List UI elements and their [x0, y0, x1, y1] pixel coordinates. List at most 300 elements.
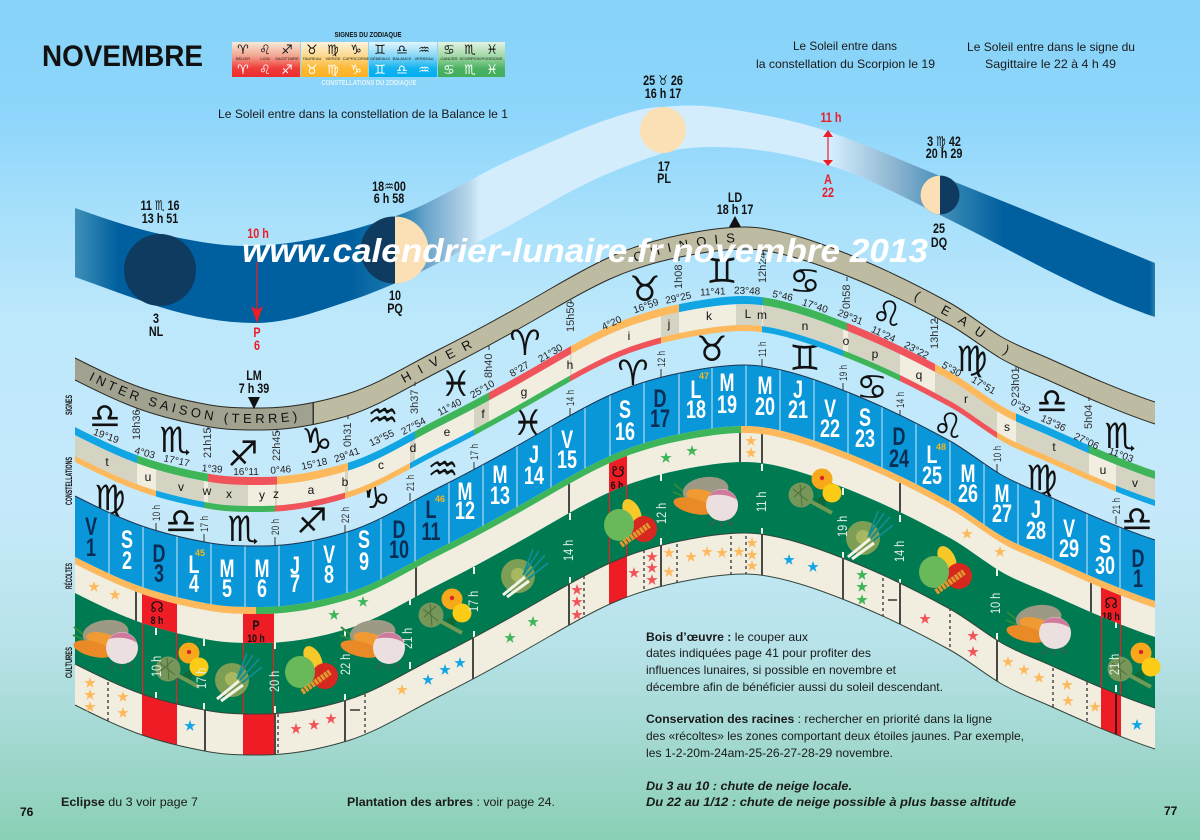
constellation symbols: ♋	[856, 368, 888, 408]
day labels: 11	[421, 517, 441, 546]
zodiac legend: ♍	[327, 63, 339, 78]
sign symbols: ♋	[789, 262, 821, 302]
constellation band fill	[75, 304, 1155, 506]
sign symbols: ♒	[367, 397, 399, 437]
day labels: 17	[650, 404, 670, 433]
full moon: 16 h 17	[645, 86, 682, 101]
full moon: 25 ♉ 26	[643, 73, 683, 88]
constellation colour stripe	[75, 325, 1155, 512]
sign time labels: 0h58	[841, 285, 853, 309]
footer notes: Plantation des arbres : voir page 24.	[347, 795, 555, 809]
constellation symbols: ♒	[427, 450, 459, 490]
sign time labels: 15h50	[565, 301, 577, 332]
constellation letters: o	[843, 334, 850, 348]
harvest band: ☊	[150, 598, 164, 616]
constellation time labels: 17 h	[469, 444, 481, 460]
text block: bois d'oeuvre: influences lunaires, si possible en novembre et	[646, 663, 897, 677]
degree labels: 27°06	[1072, 431, 1101, 452]
day labels: L	[691, 375, 701, 404]
sign time labels: 22h45	[271, 430, 283, 461]
day labels: M	[458, 477, 472, 506]
icons: lettuce and leek	[215, 511, 893, 701]
zodiac legend: ♐	[281, 63, 293, 78]
zodiac legend: ♓	[486, 43, 498, 58]
zodiac legend: ♉	[306, 63, 318, 78]
zodiac legend: BALANCE	[393, 56, 412, 61]
harvest band: 10 h	[247, 633, 265, 645]
day labels: D	[153, 539, 165, 568]
crops time labels: 14 h	[892, 541, 907, 562]
side labels	[64, 395, 75, 678]
harvest band: P	[252, 618, 260, 633]
degree labels: 13°36	[1039, 413, 1068, 434]
degree labels: 4°20	[600, 314, 624, 333]
sign symbols	[89, 252, 1136, 475]
crops time labels: 14 h	[561, 540, 576, 561]
zodiac legend: SAGITTAIRE	[275, 56, 299, 61]
day labels: 16	[615, 417, 635, 446]
sign symbols: ♐	[227, 435, 259, 475]
constellation letters: r	[964, 392, 968, 406]
title: NOVEMBRE	[42, 40, 203, 73]
lunar standstill markers: LD	[728, 190, 742, 205]
text block: snow notes	[646, 779, 1016, 809]
day labels: 18	[686, 395, 706, 424]
constellation time labels: 17 h	[199, 516, 211, 532]
day labels: L	[927, 440, 937, 469]
zodiac legend: ♒	[418, 63, 430, 78]
day labels: 1	[1133, 564, 1143, 593]
constellation time labels: 19 h	[838, 365, 850, 381]
zodiac legend: SCORPION	[459, 56, 481, 61]
day labels: D	[1132, 544, 1144, 573]
icons: fruit and wheat	[285, 496, 972, 692]
zodiac legend	[232, 30, 505, 87]
day labels: M	[255, 554, 269, 583]
day labels: 29	[1059, 534, 1079, 563]
day labels: M	[493, 460, 507, 489]
crops time labels: 21 h	[400, 628, 415, 649]
sign symbols: ♑	[301, 422, 333, 462]
new moon: 13 h 51	[142, 211, 179, 226]
zodiac legend: SIGNES DU ZODIAQUE	[334, 30, 402, 39]
apogee arrow: 22	[822, 185, 834, 200]
constellation letters: a	[308, 483, 315, 497]
degree labels: 16°59	[632, 297, 661, 316]
season band: ( EAU )	[914, 292, 1008, 356]
sign time labels: 18h36	[131, 409, 143, 440]
text block: snow notes: Du 22 au 1/12 : chute de neige possible à plus basse altitude	[646, 795, 1016, 809]
constellation letters: m	[757, 308, 767, 322]
zodiac legend: ♓	[486, 63, 498, 78]
constellation letters: n	[802, 319, 808, 333]
constellation symbols: ♑	[359, 477, 391, 517]
day labels: J	[290, 551, 300, 580]
crops time labels: 11 h	[754, 492, 769, 512]
day band	[75, 360, 1155, 610]
constellation letters: v	[178, 480, 184, 494]
last quarter moon: 20 h 29	[926, 146, 963, 161]
zodiac legend: ♊	[374, 43, 386, 58]
day labels: V	[85, 512, 97, 541]
sign time labels: 1h08	[673, 265, 685, 289]
constellation letters: i	[628, 329, 630, 343]
first quarter moon: 6 h 58	[374, 191, 405, 206]
zodiac legend: ♊	[374, 63, 386, 78]
constellation time labels: 10 h	[151, 505, 163, 521]
day labels: 7	[290, 569, 300, 598]
day labels: 21	[788, 395, 808, 424]
apogee arrow: A	[824, 172, 832, 187]
degree labels: 25°10	[469, 378, 497, 401]
header notes: Le Soleil entre dans la constellation de la Balance le 1	[218, 107, 508, 121]
harvest band: 6 h	[611, 480, 623, 492]
day labels: 24	[889, 444, 909, 473]
constellation letters: t	[1052, 440, 1056, 454]
constellation letters: k	[706, 309, 713, 323]
day labels: M	[758, 371, 772, 400]
sign time labels: 23h01	[1010, 367, 1022, 398]
day labels: M	[961, 459, 975, 488]
day labels: J	[1031, 495, 1041, 524]
header notes: Sagittaire le 22 à 4 h 49	[985, 57, 1116, 71]
sign time labels: 21h15	[202, 427, 214, 458]
constellation letters: w	[202, 484, 212, 498]
degree labels: 15°18	[300, 456, 329, 473]
first quarter moon	[360, 179, 428, 316]
constellation time labels: 21 h	[405, 475, 417, 491]
constellation letters: j	[667, 317, 670, 331]
footer notes	[61, 795, 555, 809]
season band: HIVER	[400, 340, 472, 383]
day labels: 6	[257, 574, 267, 603]
degree labels: 21°30	[537, 342, 565, 365]
zodiac legend: TAUREAU	[303, 56, 322, 61]
watermark: www.calendrier-lunaire.fr novembre 2013	[242, 232, 928, 269]
last quarter moon	[920, 134, 963, 250]
day labels: J	[529, 440, 539, 469]
crops time labels: 12 h	[654, 503, 669, 524]
day labels: 13	[490, 481, 510, 510]
last quarter moon: 3 ♍ 42	[927, 134, 961, 149]
day labels: 8	[324, 560, 334, 589]
degree labels: 0°32	[1009, 397, 1032, 417]
text block: snow notes: Du 3 au 10 : chute de neige locale.	[646, 779, 852, 793]
text block: conservation: des «récoltes» les zones comportant deux étoiles jaunes. Par exemple,	[646, 729, 1024, 743]
day labels: M	[995, 479, 1009, 508]
degree labels: 1°39	[201, 463, 223, 476]
constellation symbols: ♌	[932, 407, 964, 447]
zodiac legend: POISSONS	[482, 56, 503, 61]
page numbers	[20, 804, 1178, 819]
side labels: RÉCOLTES	[64, 563, 75, 589]
sign symbols: ♌	[871, 295, 903, 335]
sign symbols: ♎	[89, 397, 121, 437]
constellation time labels: 12 h	[656, 351, 668, 367]
sign symbols: ♍	[956, 340, 988, 380]
day labels: 27	[992, 499, 1012, 528]
harvest band: 18 h	[1102, 611, 1120, 623]
degree labels: 17°51	[969, 375, 998, 397]
crops time labels: 22 h	[338, 654, 353, 675]
constellation letters: e	[444, 425, 451, 439]
degree labels: 23°48	[734, 286, 761, 297]
day labels: V	[561, 425, 573, 454]
day labels: S	[1099, 530, 1111, 559]
day labels: 15	[557, 445, 577, 474]
new moon: 3	[153, 311, 159, 326]
degree labels: 11°24	[869, 324, 897, 345]
header notes	[218, 39, 1135, 121]
sign time labels: 13h12	[929, 318, 941, 349]
day labels: 20	[755, 392, 775, 421]
lunar standstill markers: 18 h 17	[717, 202, 754, 217]
crops band	[75, 462, 1155, 714]
zodiac legend: ♐	[281, 43, 293, 58]
zodiac legend: ♎	[396, 63, 408, 78]
season band	[74, 226, 1156, 430]
day labels: 45	[195, 548, 205, 558]
day labels: D	[654, 384, 666, 413]
day labels: L	[426, 495, 436, 524]
zodiac legend: ♏	[464, 43, 476, 58]
day labels: 1	[86, 533, 96, 562]
day labels: D	[393, 515, 405, 544]
constellation letters: u	[145, 470, 151, 484]
constellation time labels: 21 h	[1111, 498, 1123, 514]
first quarter moon: 10	[389, 288, 401, 303]
degree labels: 4°03	[133, 446, 156, 462]
day labels: 23	[855, 424, 875, 453]
day labels: M	[720, 368, 734, 397]
sign symbols: ♓	[440, 365, 472, 405]
constellation symbols: ♓	[512, 404, 544, 444]
constellation symbols: ♍	[94, 479, 126, 519]
constellation letters: s	[1004, 420, 1010, 434]
day labels: 28	[1026, 516, 1046, 545]
day labels: 14	[524, 461, 544, 490]
crops time labels: 20 h	[267, 671, 282, 692]
zodiac legend: ♈	[237, 63, 249, 78]
sign time labels: 0h31	[342, 423, 354, 447]
day labels: S	[859, 403, 871, 432]
zodiac legend: ♈	[237, 43, 249, 58]
sign symbols: ♈	[509, 324, 541, 364]
icons: artichoke and flowers	[156, 468, 1160, 687]
season band: CHINOIS	[634, 233, 734, 261]
sign symbols: ♏	[1104, 417, 1136, 457]
degree labels: 5°46	[771, 289, 794, 304]
constellation letters: b	[342, 475, 349, 489]
zodiac legend: ♉	[306, 43, 318, 58]
sign time labels: 12h24	[757, 252, 769, 283]
constellation letters: c	[378, 458, 384, 472]
apogee arrow: 11 h	[820, 110, 842, 125]
constellation letters: p	[872, 347, 879, 361]
day labels: V	[1063, 514, 1075, 543]
constellation letters: v	[1132, 476, 1138, 490]
constellation symbols: ♈	[617, 354, 649, 394]
header notes: Le Soleil entre dans le signe du	[967, 40, 1135, 54]
constellation time labels: 14 h	[895, 392, 907, 408]
degree labels: 17°17	[163, 453, 191, 470]
sign symbols: ♏	[159, 421, 191, 461]
lower colour stripe	[75, 420, 1155, 620]
text block: bois d'oeuvre: Bois d’œuvre : le couper aux	[646, 630, 808, 644]
header notes: la constellation du Scorpion le 19	[756, 57, 935, 71]
text block: bois d'oeuvre	[646, 630, 943, 694]
degree labels: 19°19	[92, 427, 120, 446]
day labels: 19	[717, 390, 737, 419]
side labels: CULTURES	[64, 647, 75, 678]
degree labels: 27°54	[400, 416, 428, 438]
day labels: 47	[699, 371, 709, 381]
constellation symbols	[94, 330, 1153, 550]
new moon	[124, 198, 196, 339]
last quarter moon: DQ	[931, 235, 947, 250]
zodiac legend: ♎	[396, 43, 408, 58]
constellation letters: x	[226, 487, 232, 501]
day labels: 12	[455, 496, 475, 525]
header notes: Le Soleil entre dans	[793, 39, 897, 53]
day labels: V	[323, 540, 335, 569]
zodiac legend: ♌	[259, 63, 271, 78]
zodiac legend: ♑	[350, 43, 362, 58]
day labels: D	[893, 422, 905, 451]
sign time labels: 8h40	[483, 354, 495, 378]
constellation letters: z	[273, 487, 279, 501]
crops time labels	[149, 492, 1122, 692]
day labels: 22	[820, 414, 840, 443]
zodiac legend: BÉLIER	[236, 56, 250, 61]
degree labels: 29°31	[836, 308, 865, 328]
harvest band: ☊	[1104, 594, 1118, 612]
degree labels: 5°30	[940, 360, 963, 380]
text block: conservation: les 1-2-20m-24am-25-26-27-28-29 novembre.	[646, 746, 893, 760]
degree labels: 23°22	[902, 340, 931, 362]
constellation letters: t	[105, 455, 109, 469]
day labels: S	[121, 525, 133, 554]
constellation time labels: 10 h	[992, 446, 1004, 462]
sign symbols: ♉	[629, 270, 661, 310]
crops time labels: 17 h	[466, 591, 481, 612]
sign time labels	[131, 251, 1095, 461]
day labels: 26	[958, 479, 978, 508]
constellation time labels: 14 h	[565, 390, 577, 406]
constellation letters: q	[916, 368, 922, 382]
cultures band	[74, 532, 1156, 756]
text block: conservation	[646, 712, 1024, 760]
crops time labels: 19 h	[835, 516, 850, 537]
icons: root vegetables	[72, 474, 1071, 670]
day labels: 30	[1095, 551, 1115, 580]
lunar standstill markers	[239, 190, 754, 409]
constellation symbols: ♎	[165, 502, 197, 542]
day labels: S	[619, 395, 631, 424]
degree labels: 29°25	[664, 290, 693, 307]
degree labels: 11°40	[436, 397, 464, 419]
constellation time labels: 11 h	[757, 342, 769, 357]
zodiac legend: ♋	[443, 63, 455, 78]
constellation letters	[105, 307, 1138, 502]
degree labels: 0°46	[270, 464, 292, 477]
lunar standstill markers: 7 h 39	[239, 381, 270, 396]
constellation symbols: ♐	[296, 502, 328, 542]
day labels: 48	[936, 442, 946, 452]
new moon: 11 ♏ 16	[140, 198, 180, 213]
text block: conservation: Conservation des racines : rechercher en priorité dans la ligne	[646, 712, 992, 726]
crops time labels: 17 h	[194, 668, 209, 689]
zodiac legend: VIERGE	[325, 56, 341, 61]
degree labels: 8°27	[508, 360, 532, 380]
full moon: 17	[658, 159, 670, 174]
day labels: J	[793, 375, 803, 404]
zodiac legend: GÉMEAUX	[370, 56, 390, 61]
last quarter moon: 25	[933, 221, 945, 236]
first quarter moon: PQ	[387, 301, 403, 316]
zodiac legend: CANCER	[441, 56, 458, 61]
moon path band	[75, 106, 1155, 323]
constellation time labels: 22 h	[340, 507, 352, 523]
side labels: CONSTELLATIONS	[64, 457, 75, 505]
perigee arrow: 10 h	[247, 226, 269, 241]
day labels: 2	[122, 546, 132, 575]
footer notes: Eclipse du 3 voir page 7	[61, 795, 198, 809]
sign symbols: ♊	[706, 252, 738, 292]
constellation letters: d	[410, 441, 416, 455]
day labels: 25	[922, 461, 942, 490]
zodiac legend: LION	[260, 56, 270, 61]
constellation time labels: 20 h	[270, 519, 282, 535]
degree labels: 13°55	[368, 428, 397, 449]
degree labels: 16°11	[233, 467, 259, 478]
full moon	[640, 73, 686, 186]
day labels: 4	[189, 569, 199, 598]
constellation letters: u	[1100, 463, 1106, 477]
day labels: 5	[222, 574, 232, 603]
harvest band	[75, 420, 1155, 650]
zodiac legend: ♒	[418, 43, 430, 58]
sign time labels: 3h37	[409, 390, 421, 414]
constellation letters: h	[567, 358, 573, 372]
zodiac legend: ♏	[464, 63, 476, 78]
crops time labels: 10 h	[149, 656, 164, 677]
harvest band: 8 h	[151, 615, 163, 627]
zodiac legend: CONSTELLATIONS DU ZODIAQUE	[322, 78, 416, 87]
sign symbols: ♎	[1036, 382, 1068, 422]
perigee arrow	[247, 226, 269, 353]
constellation symbols: ♏	[227, 510, 259, 550]
day labels: 10	[389, 535, 409, 564]
sign time labels: 5h04	[1083, 405, 1095, 429]
day labels: S	[358, 525, 370, 554]
constellation letters: g	[521, 385, 527, 399]
season band: INTER SAISON (TERRE)	[90, 372, 296, 425]
page numbers: 76	[20, 805, 34, 819]
constellation symbols: ♊	[789, 339, 821, 379]
zodiac legend: CAPRICORNE	[343, 56, 370, 61]
side labels: SIGNES	[64, 395, 75, 415]
constellation time labels	[151, 342, 1123, 545]
new moon: NL	[149, 324, 164, 339]
day labels: M	[220, 554, 234, 583]
harvest band: ☋	[611, 463, 625, 481]
day labels	[85, 368, 1144, 603]
constellation symbols: ♉	[696, 330, 728, 370]
constellation symbols: ♍	[1026, 459, 1058, 499]
perigee arrow: 6	[254, 338, 260, 353]
crops time labels: 21 h	[1107, 654, 1122, 675]
